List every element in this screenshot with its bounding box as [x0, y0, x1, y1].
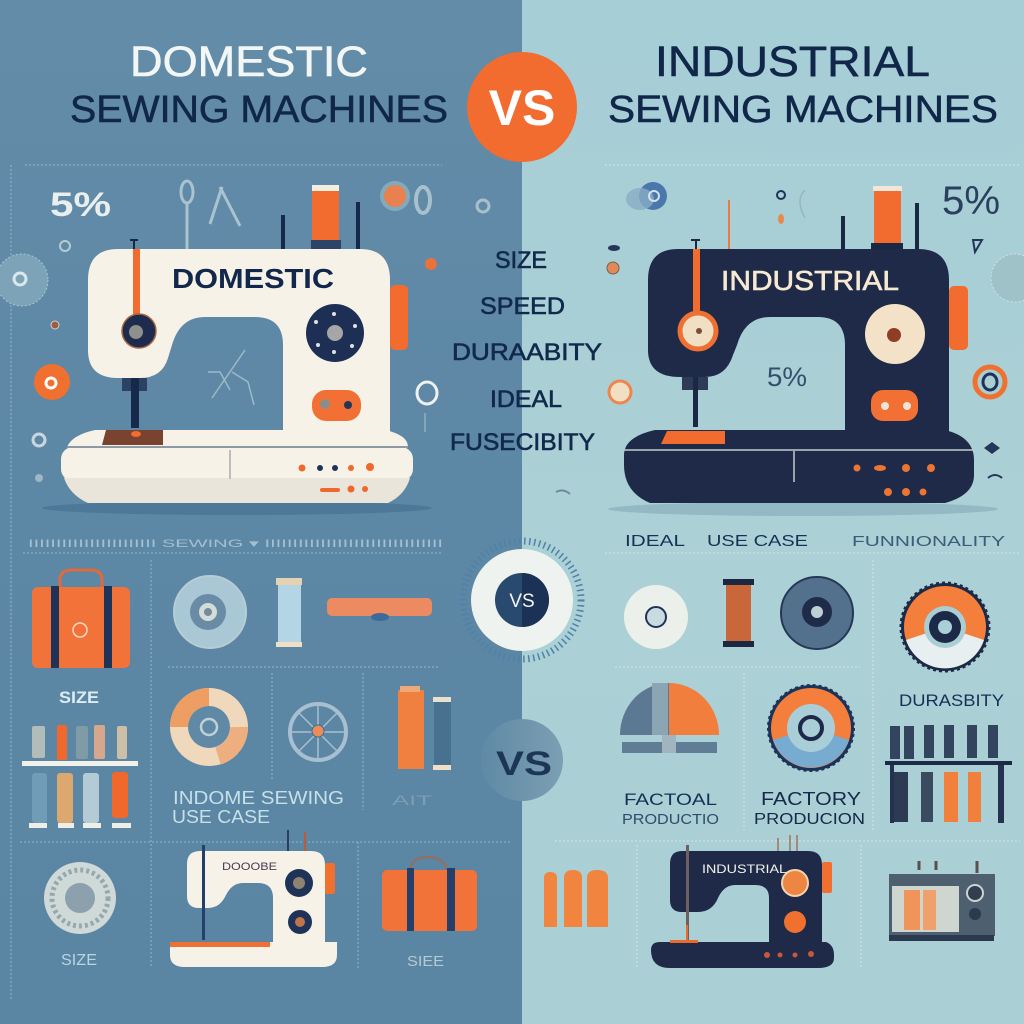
icon: orange bottles [544, 870, 608, 927]
section header: domestic (illegible): IIIIIIIIIIIIIIIIIIIIIII SEWING ▾ IIIIIIIIIIIIIIIIIIIIIIIIIIIIIIII [28, 538, 443, 550]
side knob [390, 285, 408, 350]
icons: domestic floating tools [33, 181, 489, 482]
vs round badge [481, 719, 563, 801]
thread spool [871, 186, 903, 250]
icon: domestic stitch ring [0, 254, 48, 306]
vs round badge: VS [496, 745, 552, 783]
label: indome sewing use case: USE CASE [172, 807, 270, 827]
throat scissors icon [208, 350, 254, 405]
small industrial machine: INDUSTRIAL [702, 862, 787, 876]
machine label: DOMESTIC [172, 263, 334, 294]
icon: pale spool [276, 578, 302, 647]
label: factoal production [622, 790, 719, 828]
label: factoal production: FACTOAL [624, 790, 717, 809]
label: size: SIZE [59, 688, 99, 707]
machine label: INDUSTRIAL [721, 265, 899, 296]
title: industrial sewing machines [608, 38, 998, 131]
comparison criteria list [450, 247, 602, 456]
comparison criteria list: FUSECIBITY [450, 429, 595, 456]
icon: orange gear [901, 583, 989, 671]
icon: orange bag [32, 570, 130, 668]
icon: spoked wheel [290, 704, 346, 760]
percentage: industrial 5%: 5% [942, 179, 1000, 223]
machine base [624, 430, 974, 503]
icon: industrial stitch ring [991, 254, 1024, 302]
label: factory production: PRODUCION [754, 811, 865, 828]
title: industrial sewing machines: INDUSTRIAL [655, 38, 930, 86]
icon: dark disc [781, 577, 853, 649]
label: durability: DURASBITY [899, 691, 1004, 710]
section header: industrial: IDEAL [625, 533, 685, 550]
vs badge [467, 52, 577, 162]
vs badge: VS [489, 80, 555, 136]
icon: brown spool [723, 579, 754, 647]
icon: orange ruler [327, 598, 432, 621]
icons: industrial floating tools [556, 182, 1002, 494]
section header: industrial [625, 533, 1005, 550]
icon: industrial thread rack [885, 725, 1012, 823]
title: industrial sewing machines: SEWING MACHINES [608, 89, 998, 131]
section header: industrial: USE CASE [707, 533, 808, 550]
large industrial machine [608, 186, 998, 516]
comparison criteria list: DURAABITY [452, 339, 602, 366]
side knob [949, 286, 968, 350]
label: indome sewing use case: INDOME SEWING [173, 788, 344, 808]
orange switch [871, 390, 918, 421]
icon: thread shelf [22, 725, 138, 828]
small domestic machine: DOOOBE [222, 861, 277, 873]
icon: pale button coin [44, 862, 116, 934]
icon: industrial orange ring [975, 367, 1005, 397]
comparison criteria list: SIZE [495, 247, 547, 274]
icon: factory control box [889, 861, 995, 941]
indicator lights [854, 464, 935, 496]
label: siee: SIEE [407, 953, 444, 970]
title: domestic sewing machines: SEWING MACHINES [70, 89, 448, 131]
title: domestic sewing machines: DOMESTIC [130, 38, 368, 86]
icon: orange dial wheel [170, 688, 248, 766]
dial [865, 304, 925, 364]
label: size bottom: SIZE [61, 952, 97, 969]
title: domestic sewing machines [70, 38, 448, 131]
section header: industrial: FUNNIONALITY [852, 533, 1005, 550]
icon: orange case [382, 857, 477, 931]
throat percentage: 5% [767, 362, 807, 392]
icon: blue orange gear [768, 685, 854, 771]
dial [306, 304, 364, 362]
label: factory production [754, 789, 865, 828]
comparison criteria list: IDEAL [490, 386, 562, 413]
label: factoal production: PRODUCTIO [622, 811, 719, 828]
needle assembly [122, 240, 156, 428]
label: factory production: FACTORY [761, 789, 861, 809]
panel: domestic background [0, 0, 522, 1024]
small industrial machine [651, 835, 834, 968]
icon: factory dome [620, 683, 719, 753]
icon: pale disc [174, 576, 246, 648]
small domestic machine [170, 830, 337, 967]
machine body [648, 249, 949, 432]
indicator lights [298, 463, 374, 492]
label: indome sewing use case [172, 788, 344, 827]
icon: domestic orange button [34, 364, 70, 400]
thread spool [311, 185, 341, 249]
vs gear badge [463, 541, 581, 659]
comparison criteria list: SPEED [480, 293, 565, 320]
large domestic machine [42, 185, 432, 515]
panel: industrial background [522, 0, 1024, 1024]
needle assembly [680, 240, 716, 427]
faint label: AIT [392, 792, 433, 808]
icon: light disc [624, 585, 688, 649]
percentage: domestic 5%: 5% [50, 186, 111, 224]
machine base [61, 430, 413, 503]
vs gear badge: VS [509, 591, 535, 612]
machine body [88, 249, 390, 432]
orange switch [312, 390, 361, 421]
icon: thread spools [398, 686, 451, 770]
